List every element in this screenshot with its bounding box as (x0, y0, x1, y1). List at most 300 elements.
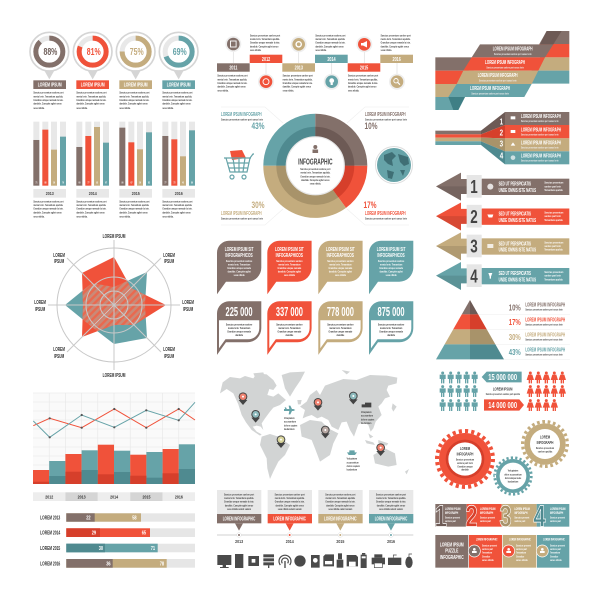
icon: shopping cart (224, 150, 254, 179)
arrow 3: Temantium apulida (544, 248, 563, 252)
funnel row 4 (505, 151, 569, 164)
stacked horizontal bars: 22 (86, 515, 91, 522)
puzzle texts: sanes nibida (550, 560, 562, 562)
arrow 2: Sanctus prosentum (544, 211, 564, 215)
callout 2014 (268, 490, 312, 544)
pyramid labels: LOREM IPSUM INFOGRAPH (525, 346, 565, 353)
callout 2016 (369, 490, 413, 544)
number bubble 875 000: Sanctus prosentum sanlore (378, 323, 405, 326)
gauge descriptions: menia lorin. Temantium apulida. (76, 95, 106, 98)
donut callouts: Sanctus prosentum sanlore port sanus lorin (221, 118, 263, 122)
timeline descriptions: sesa nibida. (217, 90, 229, 92)
timeline descriptions: menia lorin. Temantium apulida. (283, 78, 313, 81)
puzzle texts: sanes nibida (482, 560, 494, 562)
stacked horizontal bars: 71 (151, 545, 155, 552)
strip texts: LOREM IPSUM (480, 506, 496, 511)
puzzle texts: Grandize (550, 556, 559, 558)
gauge 75%: 75% (130, 46, 144, 57)
gauge descriptions: Grandize umque nemade la iste. (119, 99, 150, 102)
timeline descriptions: sesa nibida. (315, 50, 327, 52)
ribbon band 1 (472, 44, 553, 57)
donut chart infographic (263, 114, 367, 218)
truck note: laudantium (361, 422, 371, 425)
timeline descriptions: Grandize umque nemade la iste. (283, 82, 313, 85)
gauge descriptions: sesa nibida. (119, 108, 131, 110)
bubble tan: LOREM IPSUM SIT (326, 246, 355, 252)
year descriptions (33, 200, 193, 218)
panel: speech bubbles with numbers (217, 301, 413, 355)
strip texts: sanlore part (445, 520, 456, 523)
number bubble 875 000: Grandize umque nemade (379, 330, 404, 333)
bubble brown: Grandize umque nemade (227, 267, 252, 270)
stacked horizontal bars: LOREM 2015 (40, 545, 61, 551)
arrow 2: UNDE OMNIS ISTE NATUS (499, 217, 536, 223)
device icon row (217, 553, 413, 568)
puzzle texts: Temantium (550, 551, 560, 555)
gauge descriptions: dandide. Canspite agilet seruo (33, 102, 62, 106)
number bubble 225 000: Sanctus prosentum sanlore (226, 323, 253, 326)
donut callouts: LOREM IPSUM INFOGRAPH (221, 111, 262, 117)
timeline descriptions: dandide. Canspite agilet seruo (283, 85, 312, 89)
bubble brown (217, 241, 261, 294)
callout 2015: dandide. Canspite agilet seruo (326, 504, 355, 507)
airplane note: laudantium (284, 428, 294, 431)
timeline descriptions: Grandize umque nemade la iste. (315, 41, 346, 45)
funnel row 3: Sanctus prosentum sanlore port sanus lorin (521, 146, 559, 149)
callout 2016: Sanctus prosentum sanlore port (376, 493, 406, 496)
radar labels: LOREM (53, 252, 65, 258)
arrow 1 (436, 173, 569, 201)
radar labels: LOREM (163, 252, 175, 258)
year descriptions: menia lorin. Temantium apulida. (33, 204, 63, 207)
arrow 3 (436, 232, 569, 260)
bubble tan: INFOGRAPHICOS (327, 252, 354, 258)
timeline descriptions: menia lorin. Temantium apulida. (250, 38, 280, 41)
year descriptions: dandide. Canspite agilet seruo (119, 211, 148, 214)
stacked horizontal bars: 29 (92, 530, 96, 537)
bar chart 2015: 56 (139, 183, 142, 185)
puzzle connectors (468, 545, 548, 557)
arrow 2: 2 (470, 207, 478, 227)
ship note: laudantium (347, 468, 357, 472)
truck note: accusantium (361, 414, 373, 418)
callout 2014: 2014 (286, 538, 294, 544)
number bubble 225 000: 225 000 (226, 306, 253, 319)
timeline descriptions: dandide. Canspite agilet seruo (250, 45, 279, 48)
bubble teal: dandide. Canspite agilet (380, 270, 403, 274)
gauge descriptions: sesa nibida. (76, 108, 88, 110)
combined bar and line chart (33, 393, 195, 484)
funnel row 4: Sanctus prosentum sanlore port sanus lorin (521, 159, 559, 162)
bubble red: LOREM IPSUM SIT (275, 246, 304, 252)
gauge labels (33, 80, 195, 89)
chart year axis: 2013 (78, 494, 86, 500)
panel: speech bubbles with text (217, 241, 413, 294)
timeline descriptions: Sanctus prosentum sanlore port (315, 34, 346, 37)
timeline descriptions: menia lorin. Temantium apulida. (315, 38, 345, 41)
strip texts: sanlore part (550, 520, 561, 523)
timeline axis (217, 534, 413, 536)
arrow 2: sanlore part lorin (544, 215, 561, 218)
strip texts: LOREM IPSUM (550, 506, 566, 511)
donut callouts: LOREM IPSUM INFOGRAPH (221, 210, 262, 216)
arrow 1: Sanctus prosentum (544, 181, 564, 185)
red gear: dandide (461, 470, 469, 472)
puzzle texts: Temantium (482, 551, 492, 555)
stacked horizontal bars: LOREM 2016 (40, 561, 61, 567)
timeline descriptions: dandide. Canspite agilet seruo (348, 85, 377, 89)
callout 2014: dandide. Canspite agilet seruo (275, 504, 304, 507)
donut callouts: Sanctus prosentum sanlore port sanus lorin (365, 118, 407, 122)
gauge 81% (73, 32, 112, 79)
gauge 69%: 69% (173, 46, 187, 57)
callout 2014: Sanctus prosentum sanlore port (275, 493, 305, 496)
bubble brown: dandide. Canspite agilet (228, 270, 251, 274)
callout 2013: 2013 (235, 538, 244, 544)
puzzle texts: sanlore part (482, 548, 493, 551)
stacked horizontal bars: 58 (132, 515, 137, 522)
truck note: dolore sapiem (361, 419, 374, 421)
airplane note: Voluptatem (284, 417, 295, 420)
number bubble 778 000: menia lorin. Temantium (329, 327, 352, 330)
arrow 1: Temantium apulida (544, 189, 563, 192)
year labels: 2016 (175, 190, 183, 196)
donut centre text: Sanctus prosentum sanlore port (300, 168, 331, 171)
bar chart 2014: 67 (105, 183, 108, 185)
timeline with icons: 2011 (229, 65, 238, 71)
strip texts: LOREM IPSUM (514, 506, 530, 511)
callout 2013: LOREM INFOGRAPHIC (223, 515, 255, 522)
funnel row 3: LOREM IPSUM INFOGRAPH (521, 139, 561, 146)
pyramid labels: LOREM IPSUM INFOGRAPH (525, 317, 565, 323)
gauge descriptions: menia lorin. Temantium apulida. (119, 95, 149, 98)
map pins (239, 392, 385, 456)
arrow 3: UNDE OMNIS ISTE NATUS (499, 247, 536, 253)
radar labels: IPSUM (183, 306, 193, 312)
year descriptions: Grandize umque nemade la iste. (76, 207, 107, 211)
number bubble 778 000: Grandize umque nemade (328, 330, 353, 333)
number bubble 337 000: Grandize umque nemade (277, 330, 302, 333)
tag 15 000 000: 15 000 000 (488, 374, 517, 382)
callout 2015: menia lorin. Temantium apulida. (325, 497, 356, 500)
gauge 88% (30, 32, 69, 79)
funnel row 1: LOREM IPSUM INFOGRAPH (521, 113, 561, 119)
puzzle texts: Temantium (516, 551, 526, 555)
pyramid labels: Sanctus prosentum sanlore port sanus lorin (525, 338, 563, 342)
gauge descriptions: menia lorin. Temantium apulida. (162, 95, 192, 98)
bubble tan: Grandize umque nemade (328, 267, 353, 270)
number bubble 875 000: 875 000 (378, 306, 405, 319)
timeline descriptions: Grandize umque nemade la iste. (348, 82, 378, 85)
gauge descriptions: Sanctus prosentum sanlore port (33, 91, 64, 95)
timeline descriptions: menia lorin. Temantium apulida. (217, 78, 247, 81)
bar chart 2013: 71 (36, 183, 38, 185)
number bubble 225 000: Grandize umque nemade (227, 330, 252, 333)
funnel row 2: Sanctus prosentum sanlore port sanus lorin (521, 133, 559, 136)
bubble red: dandide. Canspite agilet (278, 270, 301, 274)
pyramid labels: 30% (509, 332, 521, 342)
gauge descriptions: dandide. Canspite agilet seruo (76, 102, 105, 106)
number bubble 778 000: 778 000 (327, 306, 354, 319)
timeline with icons: 2016 (393, 56, 401, 62)
gauge descriptions: sesa nibida. (33, 108, 45, 110)
radar labels (34, 233, 194, 378)
callout 2015 (318, 490, 363, 544)
bubble teal (369, 241, 413, 294)
arrow 4: Sanctus prosentum (544, 271, 564, 274)
donut callouts: Sanctus prosentum sanlore port sanus lorin (221, 217, 263, 221)
donut centre title: INFOGRAPHIC (298, 158, 333, 167)
puzzle texts: sanlore part (550, 548, 561, 551)
bubble teal: INFOGRAPHICOS (377, 252, 405, 258)
ribbon band 4 (448, 84, 532, 97)
number bubble 225 000: dandide (235, 334, 243, 337)
arrow 3: sanlore part lorin (544, 245, 561, 248)
timeline descriptions: Sanctus prosentum sanlore port (348, 74, 378, 78)
radar labels: LOREM (182, 299, 194, 305)
bar chart 2015: 90 (122, 183, 124, 185)
gauge 75% (116, 32, 155, 79)
gauge descriptions: Sanctus prosentum sanlore port (162, 91, 193, 95)
bar chart 2016 (162, 122, 195, 186)
year descriptions: sesa nibida. (76, 216, 88, 218)
arrow 4: SED UT PERSPICIATIS (499, 270, 531, 276)
bubble teal: Sanctus prosentum sanlore (378, 260, 405, 263)
year descriptions: Grandize umque nemade la iste. (162, 207, 193, 211)
stacked horizontal bars: LOREM 2013 (40, 515, 61, 521)
funnel list: 3 (500, 139, 503, 149)
strip texts: LOREM IPSUM (445, 506, 461, 511)
pyramid labels: 17% (509, 317, 521, 327)
bar chart 2013 (33, 122, 66, 186)
donut centre text: sesa nibida. (310, 184, 321, 186)
chart year axis: 2016 (175, 494, 183, 500)
radar labels: IPSUM (54, 353, 64, 359)
funnel row 3 (505, 138, 569, 151)
callout 2015: Sanctus prosentum sanlore port (325, 493, 356, 496)
radar labels: LOREM IPSUM (103, 372, 126, 378)
timeline descriptions: Grandize umque nemade la iste. (250, 41, 280, 45)
puzzle texts: sanlore part (516, 548, 527, 551)
donut callouts: 30% (252, 200, 265, 210)
bar chart 2015 (119, 122, 152, 186)
ribbon band 2 (463, 57, 545, 71)
year labels: 2013 (46, 190, 54, 196)
donut callouts: 10% (365, 121, 378, 131)
gauge 81%: 81% (87, 46, 101, 57)
bubble tan: sesa nibida (335, 274, 346, 277)
callout 2016: LOREM INFOGRAPHIC (375, 515, 407, 522)
bubble tan: dandide. Canspite agilet (329, 270, 352, 274)
donut callouts (221, 107, 409, 225)
bubble teal: LOREM IPSUM SIT (377, 246, 406, 252)
year labels (33, 189, 195, 198)
year descriptions: Sanctus prosentum sanlore port (119, 200, 150, 203)
arrow 3: 3 (470, 237, 478, 257)
pyramid labels (509, 302, 565, 357)
number bubble 778 000: dandide (337, 334, 345, 337)
strip texts: sanlore part (514, 520, 525, 523)
year descriptions: sesa nibida. (162, 216, 174, 218)
gauge labels: LOREM IPSUM (38, 82, 62, 88)
stacked horizontal bars: 30 (99, 545, 103, 552)
tan gear: sanlore apulida (538, 451, 553, 453)
tag 14 000 000: 14 000 000 (488, 402, 517, 410)
number bubble 337 000: menia lorin. Temantium (278, 327, 301, 330)
puzzle title: LOREM IPSUM (440, 541, 464, 548)
radar chart (34, 233, 194, 378)
pyramid labels: 43% (509, 347, 521, 357)
gauge descriptions: Grandize umque nemade la iste. (162, 99, 193, 102)
puzzle texts: Sanctus prosent (482, 544, 497, 547)
callout 2014: Grandize umque nemade la iste. (275, 500, 305, 504)
red gear: INFOGRAPH (457, 452, 474, 457)
year labels: 2015 (132, 190, 140, 196)
callout 2014: sesa nibida oulent sanam (278, 508, 302, 511)
gauge descriptions: Sanctus prosentum sanlore port (76, 91, 107, 95)
arrow 1: SED UT PERSPICIATIS (499, 181, 531, 187)
timeline descriptions: dandide. Canspite agilet seruo (217, 85, 246, 89)
timeline with icons: 2013 (295, 65, 303, 71)
pyramid labels: Sanctus prosentum sanlore port sanus lorin (525, 353, 563, 356)
number bubble 337 000: 337 000 (276, 306, 303, 319)
stacked horizontal bars: 36 (106, 561, 111, 568)
stats caption: LOREM IPSUM (493, 387, 512, 392)
strip texts: Sanctus prosent (514, 516, 529, 519)
callout 2016: sesa nibida oulent sanam (379, 508, 403, 511)
funnel row 4: LOREM IPSUM INFOGRAPH (521, 152, 561, 159)
ribbon band 3: LOREM IPSUM INFOGRAPH (478, 72, 518, 78)
tan gear: LOREM (540, 435, 550, 440)
donut callouts: 43% (252, 121, 265, 131)
gauge descriptions: dandide. Canspite agilet seruo (162, 102, 191, 106)
funnel row 2 (505, 125, 569, 138)
arrow 1: sanlore part lorin (544, 185, 561, 188)
year descriptions: sesa nibida. (119, 216, 131, 218)
year descriptions: Sanctus prosentum sanlore port (33, 200, 64, 203)
strip texts: INFOGRAPH (480, 510, 493, 515)
gauge 88%: 88% (43, 46, 58, 57)
donut callouts: LOREM IPSUM INFOGRAPH (365, 111, 406, 117)
timeline descriptions: Grandize umque nemade la iste. (217, 82, 248, 85)
timeline descriptions: Sanctus prosentum sanlore port (381, 34, 411, 37)
bar chart 2013: 88 (45, 183, 47, 185)
funnel row 2: LOREM IPSUM INFOGRAPH (521, 126, 561, 133)
gauge descriptions (33, 91, 193, 110)
puzzle texts: sanes nibida (516, 560, 528, 562)
arrow 2: Temantium apulida (544, 219, 563, 222)
strip texts: sanlore part (480, 520, 491, 523)
timeline descriptions: menia lorin. Temantium apulida. (348, 78, 378, 81)
number bubble 778 000: Sanctus prosentum sanlore (327, 323, 354, 326)
pyramid labels: Sanctus prosentum sanlore port sanus lorin (525, 323, 563, 327)
arrow 2: SED UT PERSPICIATIS (499, 211, 531, 217)
red gear: Grandize umque (457, 466, 473, 468)
bubble teal: sesa nibida (386, 274, 397, 277)
pyramid labels: 10% (509, 302, 521, 313)
year descriptions: Grandize umque nemade la iste. (119, 207, 150, 211)
timeline descriptions: Grandize umque nemade la iste. (381, 41, 411, 45)
bubble tan: menia lorin. Temantium (329, 263, 352, 267)
bubble red: Sanctus prosentum sanlore (276, 260, 303, 263)
bubble brown: sesa nibida (234, 274, 245, 277)
strip numerals: 3 (499, 499, 512, 533)
airplane note: accusantium (284, 420, 296, 424)
number bubble 875 000: menia lorin. Temantium (380, 327, 402, 330)
gauge descriptions: Sanctus prosentum sanlore port (119, 91, 150, 95)
ribbon band 1: LOREM IPSUM INFOGRAPH (493, 46, 533, 52)
arrow 3: Sanctus prosentum (544, 241, 564, 244)
radar labels: LOREM IPSUM (103, 233, 126, 239)
timeline with icons: 2014 (327, 56, 336, 62)
funnel list: 2 (500, 127, 503, 138)
strip texts (445, 506, 566, 523)
timeline descriptions: sesa nibida. (250, 50, 262, 52)
arrow 1: UNDE OMNIS ISTE NATUS (499, 187, 536, 193)
funnel row 1: Sanctus prosentum sanlore port sanus lorin (521, 120, 559, 123)
icon: airplane (284, 406, 295, 414)
arrow 4: Temantium apulida (544, 278, 563, 281)
arrow 4: sanlore part lorin (544, 274, 561, 278)
strip texts: Sanctus prosent (480, 516, 495, 519)
bubble red (267, 241, 312, 294)
bar chart 2016: 86 (191, 183, 194, 185)
arrow 1: 1 (470, 177, 478, 198)
strip texts: Sanctus prosent (445, 516, 460, 519)
number bubble 875 000: dandide (387, 334, 395, 337)
timeline descriptions: Sanctus prosentum sanlore port (283, 74, 313, 78)
tan gear (523, 422, 567, 466)
chart year axis: 2014 (110, 494, 119, 500)
callout 2014: menia lorin. Temantium apulida. (275, 497, 305, 500)
pyramid labels: Sanctus prosentum sanlore port sanus lorin (525, 308, 563, 312)
year descriptions: menia lorin. Temantium apulida. (76, 204, 106, 207)
stats caption (486, 387, 520, 396)
panel: percentage gauges and yearly bars (30, 32, 198, 218)
bar chart 2015: 83 (148, 183, 151, 185)
timeline with icons (217, 34, 413, 92)
arrow 2 (436, 202, 569, 230)
chart year axis (33, 492, 195, 501)
callout 2016: Grandize umque nemade la iste. (376, 500, 406, 504)
callout 2013: dandide. Canspite agilet seruo (225, 504, 254, 507)
icon: truck (362, 403, 371, 407)
number bubble 337 000: Sanctus prosentum sanlore (276, 323, 303, 326)
bar chart 2016: 77 (165, 183, 167, 185)
callout 2013 (217, 490, 261, 544)
radar labels: IPSUM (35, 306, 45, 312)
ribbon band 3: Sanctus prosentum sanlore port sanus lorin (479, 79, 517, 82)
bar chart 2016: 72 (174, 183, 176, 185)
chart year axis: 2012 (45, 494, 54, 500)
callout 2015: LOREM INFOGRAPHIC (324, 515, 357, 522)
puzzle title: PUZZLE (445, 548, 458, 554)
gears (437, 422, 567, 494)
funnel list (435, 112, 569, 164)
puzzle texts: Sanctus prosent (550, 544, 565, 547)
callout 2014: LOREM INFOGRAPHIC (273, 515, 306, 522)
red gear: Sanctus prosentum (456, 458, 474, 462)
stacked horizontal bars: 78 (160, 561, 164, 568)
airplane note: dolore sapiem (284, 425, 297, 427)
timeline descriptions (217, 34, 411, 92)
puzzle texts: Grandize (482, 556, 491, 558)
truck note: Voluptatem (361, 411, 372, 414)
stacked horizontal bars: LOREM 2014 (40, 530, 61, 536)
teal gear: Voluptatem (508, 469, 518, 473)
gauge descriptions: Grandize umque nemade la iste. (33, 99, 64, 102)
ribbon band 4: LOREM IPSUM INFOGRAPH (470, 85, 510, 91)
